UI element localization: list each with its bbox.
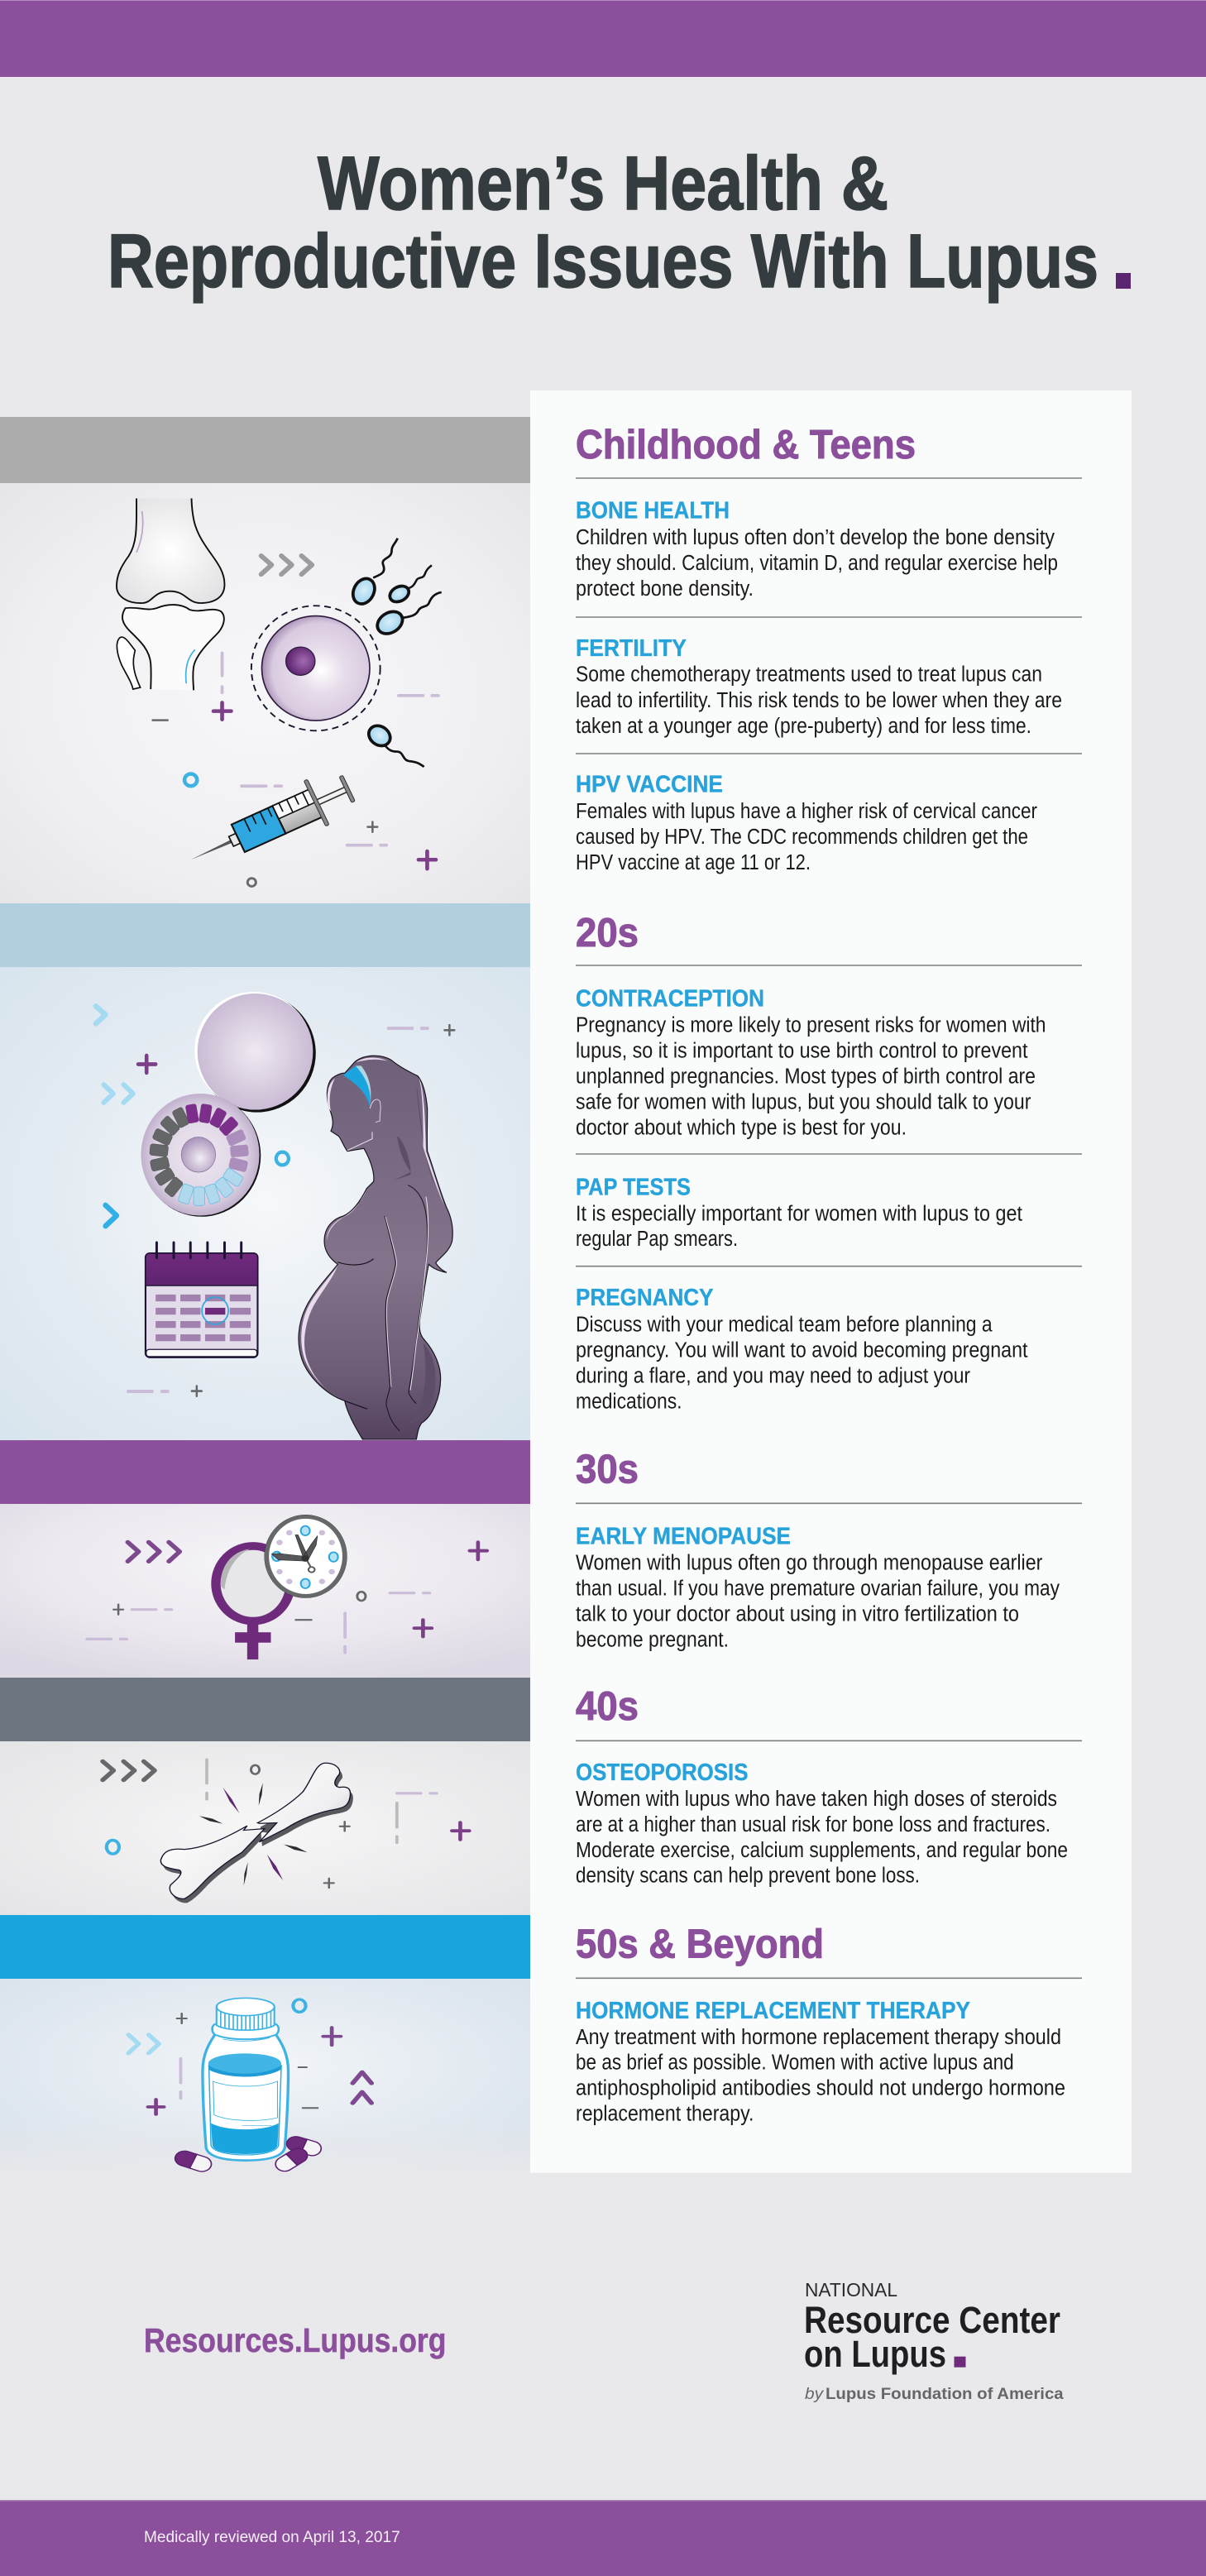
text block: pregnancy: Discuss with your medical team before planning a [576,1314,993,1337]
text block: early menopause: talk to your doctor about using in vitro fertilization to [576,1602,1019,1626]
icon: birth control pill pack [141,1094,261,1217]
icon: birth control pack lid [194,992,316,1113]
icon: decorative marks [152,556,438,886]
text block: bone health: Children with lupus often don’t develop the bone density [576,526,1055,549]
text block: hormone replacement therapy: Any treatment with hormone replacement therapy should [576,2026,1061,2049]
icon: calendar [146,1243,257,1357]
text block: hpv vaccine [576,771,1037,874]
icon: fractured bone [160,1763,353,1903]
text block: early menopause: Women with lupus often go through menopause earlier [576,1551,1043,1574]
panel: 50s and beyond illustration [0,1915,530,2177]
text block: contraception: CONTRACEPTION [576,986,764,1013]
heading: Childhood & Teens: Childhood & Teens [576,423,916,467]
heading: 50s & Beyond: 50s & Beyond [576,1922,824,1967]
icon: fracture burst lines [199,1783,308,1885]
icon: medicine bottle [203,1998,289,2161]
text block: contraception: doctor about which type is best for you. [576,1117,907,1140]
heading: 40s: 40s [576,1684,639,1729]
text block: hormone replacement therapy: be as brief as possible. Women with active lupus and [576,2052,1014,2075]
logo: National Resource Center on Lupus: NATIONAL [805,2279,897,2301]
text block: osteoporosis: are at a higher than usual risk for bone loss and fractures. [576,1813,1050,1836]
heading: 30s: 30s [576,1448,639,1492]
text block: hormone replacement therapy: replacement therapy. [576,2102,754,2125]
icon: sperm cells [349,539,442,767]
bottom purple band with review date [0,2500,1206,2576]
text block: pregnancy: medications. [576,1391,682,1414]
top purple band [0,0,1206,78]
text block: osteoporosis: Women with lupus who have taken high doses of steroids [576,1788,1057,1811]
icon: decorative marks [96,1006,454,1396]
icon: decorative marks [103,1760,469,1888]
text block: contraception: safe for women with lupus, but you should talk to your [576,1091,1031,1114]
text block: osteoporosis: OSTEOPOROSIS [576,1760,748,1786]
text block: bone health: protect bone density. [576,577,754,601]
text block: fertility: FERTILITY [576,635,687,662]
text block: hormone replacement therapy: antiphospholipid antibodies should not undergo hormone [576,2077,1065,2100]
logo: National Resource Center on Lupus: by [805,2386,825,2403]
text block: fertility [576,635,1082,754]
text block: hpv vaccine: Females with lupus have a higher risk of cervical cancer [576,800,1037,823]
text block: hpv vaccine: HPV vaccine at age 11 or 12. [576,851,811,874]
text block: pregnancy: during a flare, and you may need to adjust your [576,1365,970,1388]
text block: hpv vaccine: caused by HPV. The CDC recommends children get the [576,826,1028,849]
text block: contraception: Pregnancy is more likely to present risks for women with [576,1014,1046,1037]
text block: early menopause: become pregnant. [576,1628,729,1651]
text block: pregnancy: pregnancy. You will want to avoid becoming pregnant [576,1339,1027,1362]
icon: decorative marks [87,1542,487,1653]
logo: National Resource Center on Lupus: on Lupus [804,2333,946,2375]
text block: early menopause: than usual. If you have premature ovarian failure, you may [576,1577,1060,1600]
icon: capsules [172,2134,323,2174]
text block: contraception: unplanned pregnancies. Most types of birth control are [576,1065,1036,1089]
text block: bone health [576,498,1082,617]
icon: decorative marks [128,1999,371,2114]
logo: National Resource Center on Lupus: Lupus Foundation of America [826,2386,1064,2403]
text block: bone health: they should. Calcium, vitamin D, and regular exercise help [576,552,1058,575]
title: Women’s Health & [318,141,888,226]
text block: osteoporosis [576,1760,1068,1888]
text block: hormone replacement therapy [576,1998,1065,2125]
icon: clock [265,1515,347,1597]
text block: hormone replacement therapy: HORMONE REPLACEMENT THERAPY [576,1998,970,2024]
text block: bone health: BONE HEALTH [576,498,730,524]
panel: text column [530,390,1132,2172]
text block: pap tests: It is especially important for women with lupus to get [576,1203,1022,1226]
icon: knee joint [117,498,224,690]
text block: fertility: Some chemotherapy treatments used to treat lupus can [576,663,1042,687]
panel: 20s illustration [0,903,530,1440]
text block: pregnancy [576,1285,1027,1414]
bottom purple band with review date: Medically reviewed on April 13, 2017 [144,2529,400,2546]
text block: pregnancy: PREGNANCY [576,1285,713,1311]
icon: syringe [179,765,360,883]
text block: osteoporosis: density scans can help prevent bone loss. [576,1865,920,1888]
panel: 30s illustration [0,1440,530,1678]
text block: hpv vaccine: HPV VACCINE [576,771,723,797]
text block: osteoporosis: Moderate exercise, calcium supplements, and regular bone [576,1839,1068,1862]
icon: female symbol [216,1546,290,1659]
text block: pap tests: regular Pap smears. [576,1228,738,1251]
heading: 20s: 20s [576,911,639,955]
text block: fertility: lead to infertility. This risk tends to be lower when they are [576,689,1062,712]
text block: fertility: taken at a younger age (pre-puberty) and for less time. [576,715,1031,738]
text block: contraception: lupus, so it is important to use birth control to prevent [576,1040,1027,1063]
panel: 40s illustration [0,1678,530,1915]
text block: early menopause [576,1524,1060,1651]
text block: early menopause: EARLY MENOPAUSE [576,1524,791,1550]
panel: childhood and teens illustration [0,417,530,903]
logo: National Resource Center on Lupus [804,2279,1064,2403]
text block: pap tests: PAP TESTS [576,1174,691,1200]
logo: National Resource Center on Lupus: Resource Center [804,2299,1060,2341]
title [108,141,1131,304]
text block: contraception [576,986,1082,1154]
website link text: Resources.Lupus.org [144,2321,447,2359]
icon: egg cell [251,606,380,730]
text block: pap tests [576,1174,1082,1266]
icon: pregnant woman silhouette [299,1056,452,1439]
